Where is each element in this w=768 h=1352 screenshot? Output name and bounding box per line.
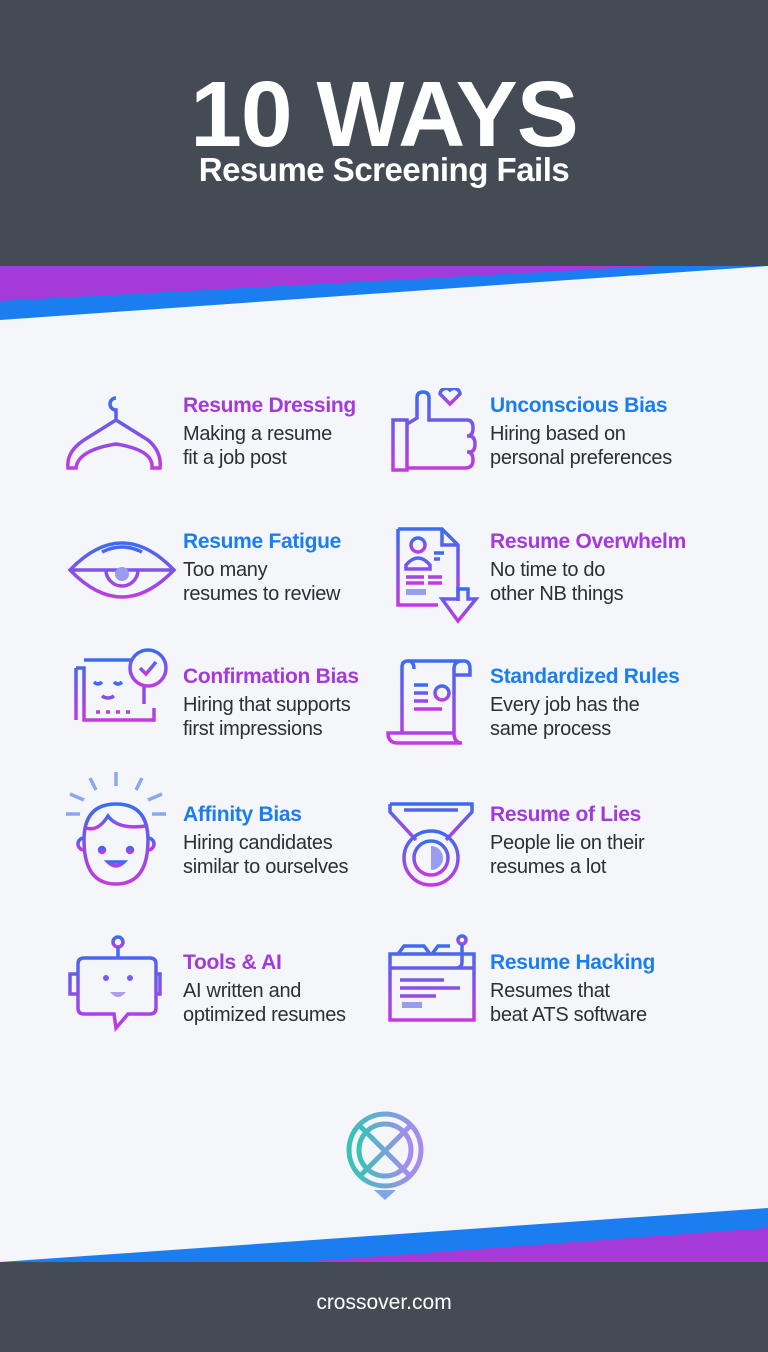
subtitle: Resume Screening Fails [199, 151, 569, 188]
item: Resume Dressing: Making a resume [183, 423, 332, 445]
item: Resume of Lies: People lie on their [490, 832, 644, 854]
item: Confirmation Bias [183, 665, 359, 740]
item: Standardized Rules: Every job has the [490, 694, 639, 716]
icon: hanger [66, 396, 162, 470]
icon: face note with check [74, 648, 168, 722]
icon: thumbs up [391, 388, 477, 472]
item: Resume Fatigue: Resume Fatigue [183, 530, 341, 553]
item: Resume of Lies [490, 803, 644, 878]
item: Resume Dressing: Resume Dressing [183, 394, 356, 417]
item: Resume Overwhelm: other NB things [490, 583, 623, 605]
item: Standardized Rules: same process [490, 718, 611, 740]
item: Resume of Lies: resumes a lot [490, 856, 606, 878]
item: Affinity Bias: Hiring candidates [183, 832, 332, 854]
header band [0, 0, 768, 266]
item: Resume Hacking: Resume Hacking [490, 951, 655, 974]
item: Unconscious Bias: personal preferences [490, 447, 672, 469]
icon: scroll [386, 659, 472, 745]
item: Standardized Rules: Standardized Rules [490, 665, 679, 688]
item: Tools & AI: AI written and [183, 980, 301, 1002]
title: 10 WAYS [190, 62, 578, 166]
footer text: crossover.com [316, 1291, 452, 1314]
item: Affinity Bias: Affinity Bias [183, 803, 302, 826]
item: Unconscious Bias [490, 394, 672, 469]
item: Resume Dressing: fit a job post [183, 447, 287, 469]
item: Resume Hacking: Resumes that [490, 980, 610, 1002]
footer [0, 1262, 768, 1352]
icon: robot [68, 935, 162, 1032]
item: Resume Overwhelm [490, 530, 686, 605]
item: Resume Hacking: beat ATS software [490, 1004, 647, 1026]
item: Resume of Lies: Resume of Lies [490, 803, 641, 826]
item: Affinity Bias: similar to ourselves [183, 856, 348, 878]
item: Affinity Bias [183, 803, 348, 878]
item: Tools & AI: optimized resumes [183, 1004, 346, 1026]
item: Unconscious Bias: Hiring based on [490, 423, 626, 445]
icon: browser with hook [388, 934, 476, 1022]
item: Resume Overwhelm: Resume Overwhelm [490, 530, 686, 553]
item: Confirmation Bias: Confirmation Bias [183, 665, 359, 688]
item: Unconscious Bias: Unconscious Bias [490, 394, 667, 417]
item: Resume Fatigue: Too many [183, 559, 267, 581]
item: Resume Fatigue: resumes to review [183, 583, 340, 605]
item: Confirmation Bias: Hiring that supports [183, 694, 350, 716]
icon: face with rays [66, 772, 166, 886]
item: Resume Overwhelm: No time to do [490, 559, 605, 581]
icon: eye [68, 541, 176, 599]
logo [346, 1112, 424, 1200]
item: Resume Fatigue [183, 530, 341, 605]
item: Confirmation Bias: first impressions [183, 718, 322, 740]
item: Standardized Rules [490, 665, 679, 740]
item: Resume Dressing [183, 394, 356, 469]
icon: medal [388, 802, 474, 887]
item: Tools & AI: Tools & AI [183, 951, 282, 974]
icon: document with arrow [396, 527, 480, 624]
item: Tools & AI [183, 951, 346, 1026]
item: Resume Hacking [490, 951, 655, 1026]
